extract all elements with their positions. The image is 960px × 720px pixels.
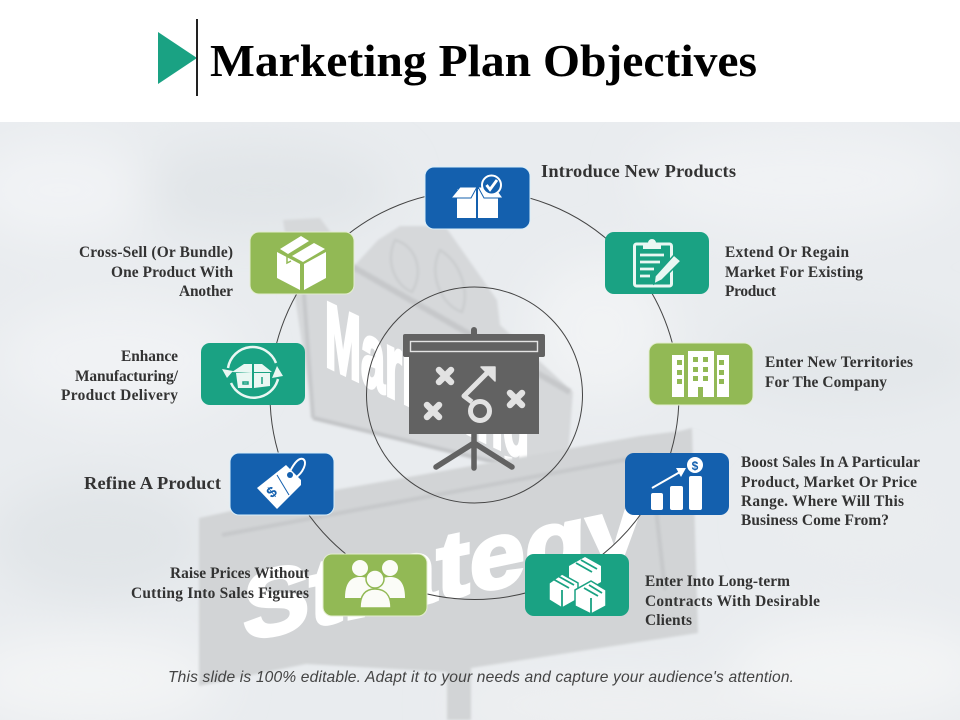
label: extend or regain market: Extend Or Regain <box>725 244 849 261</box>
label: enhance manufacturing: Manufacturing/ <box>75 368 179 385</box>
outer ring <box>270 190 679 600</box>
label: cross-sell: Cross-Sell (Or Bundle) <box>79 244 233 261</box>
label: enhance manufacturing: Product Delivery <box>61 387 178 404</box>
label: long-term contracts: Enter Into Long-term <box>645 573 790 590</box>
center icon: strategy board <box>403 327 545 468</box>
tile: raise prices <box>323 554 427 616</box>
label: long-term contracts: Contracts With Desirable <box>645 593 820 610</box>
label: raise prices <box>131 565 310 602</box>
label: boost sales: Product, Market Or Price <box>741 474 917 491</box>
label: long-term contracts <box>645 573 820 629</box>
upper sign <box>283 218 573 480</box>
label: enter new territories: Enter New Territories <box>765 354 913 371</box>
title divider <box>196 19 198 96</box>
label: cross-sell <box>79 244 233 300</box>
label: raise prices: Cutting Into Sales Figures <box>131 585 309 602</box>
title: Marketing Plan Objectives <box>210 35 757 86</box>
title marker arrow <box>158 32 197 84</box>
tile: enter new territories <box>649 343 753 405</box>
label: extend or regain market: Market For Existing <box>725 264 863 281</box>
label: cross-sell: One Product With <box>111 264 233 281</box>
tile: refine a product <box>230 453 334 515</box>
label: boost sales: Boost Sales In A Particular <box>741 454 920 471</box>
label: introduce new products: Introduce New Products <box>541 161 736 181</box>
label: boost sales: Range. Where Will This <box>741 493 904 510</box>
tile: long-term contracts <box>525 554 629 616</box>
label: enter new territories <box>765 354 913 391</box>
label: enhance manufacturing: Enhance <box>121 348 178 365</box>
label: enter new territories: For The Company <box>765 374 887 391</box>
lower sign lettering: Strategy <box>243 472 641 661</box>
tile: enhance manufacturing <box>201 343 305 405</box>
label: long-term contracts: Clients <box>645 612 692 629</box>
label: extend or regain market <box>725 244 863 300</box>
label: extend or regain market: Product <box>725 283 777 300</box>
tile: refine a product: $ <box>263 483 281 502</box>
lower sign <box>199 428 698 720</box>
tile: boost sales <box>625 453 729 515</box>
label: raise prices: Raise Prices Without <box>170 565 310 582</box>
label: enhance manufacturing <box>61 348 179 404</box>
tile: introduce new products <box>425 167 530 229</box>
tile: cross-sell <box>250 232 354 294</box>
tile: extend or regain market <box>605 232 709 294</box>
upper sign lettering: Marketing <box>325 282 529 483</box>
label: boost sales: Business Come From? <box>741 512 889 529</box>
label: boost sales <box>741 454 920 529</box>
label: cross-sell: Another <box>179 283 233 300</box>
tile: boost sales: $ <box>692 459 699 473</box>
footer note: This slide is 100% editable. Adapt it to your needs and capture your audience's attention. <box>168 669 794 686</box>
label: refine a product: Refine A Product <box>84 473 222 493</box>
inner ring <box>366 287 582 503</box>
